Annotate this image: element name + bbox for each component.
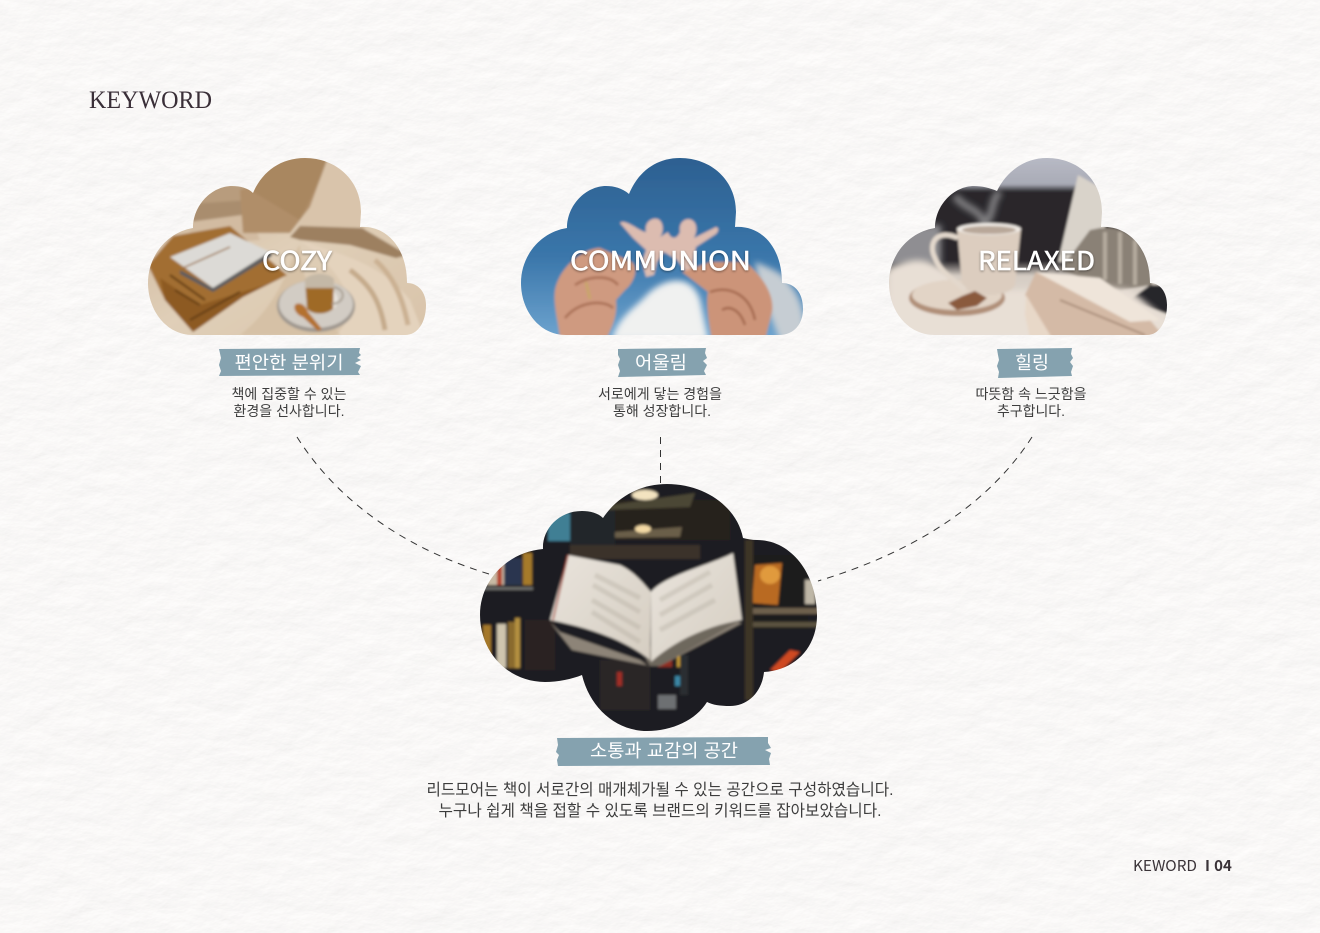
- description: central: 누구나 쉽게 책을 접할 수 있도록 브랜드의 키워드를 잡아보았습니다.: [438, 802, 882, 820]
- cloud word: RELAXED: RELAXED: [978, 241, 1095, 278]
- panel: central concept: [426, 482, 894, 820]
- cloud word: COZY: COZY: [262, 241, 332, 278]
- title: KEYWORD: [89, 87, 212, 114]
- description: central: 리드모어는 책이 서로간의 매개체가될 수 있는 공간으로 구성하였습니다.: [426, 781, 894, 799]
- photo cloud: open book in library: [478, 482, 820, 734]
- description: communion: 통해 성장합니다.: [613, 403, 711, 419]
- photo cloud: cozy bed scene: [145, 155, 430, 340]
- dashed connector: relaxed to center: [818, 437, 1032, 581]
- photo cloud: cup of coffee and book: [886, 155, 1170, 338]
- description: relaxed: 추구합니다.: [997, 403, 1065, 419]
- tag: space of communication and empathy: [556, 737, 771, 766]
- panel: communion: [518, 155, 806, 419]
- panel: cozy: [145, 155, 430, 419]
- page footer: I 04: [1205, 855, 1232, 876]
- description: communion: 서로에게 닿는 경험을: [598, 386, 722, 402]
- tag: healing: 힐링: [1015, 353, 1049, 373]
- page footer: [1133, 855, 1232, 876]
- tag: harmony: [618, 348, 707, 377]
- tag: comfortable mood: 편안한 분위기: [234, 353, 344, 373]
- tag: healing: [997, 348, 1073, 378]
- dashed connector: cozy to center: [297, 437, 489, 574]
- page footer: KEWORD: [1133, 855, 1197, 876]
- description: relaxed: 따뜻함 속 느긋함을: [976, 386, 1087, 402]
- description: cozy: 책에 집중할 수 있는: [232, 386, 347, 402]
- description: cozy: 환경을 선사합니다.: [234, 403, 344, 419]
- tag: space of communication and empathy: 소통과 교감의 공간: [590, 741, 738, 761]
- dashed connector: communion to center: [660, 437, 662, 483]
- cloud word: COMMUNION: COMMUNION: [570, 241, 751, 278]
- photo cloud: hands and paper people: [518, 155, 806, 340]
- tag: comfortable mood: [219, 348, 361, 376]
- tag: harmony: 어울림: [635, 353, 687, 373]
- panel: relaxed: [886, 155, 1170, 419]
